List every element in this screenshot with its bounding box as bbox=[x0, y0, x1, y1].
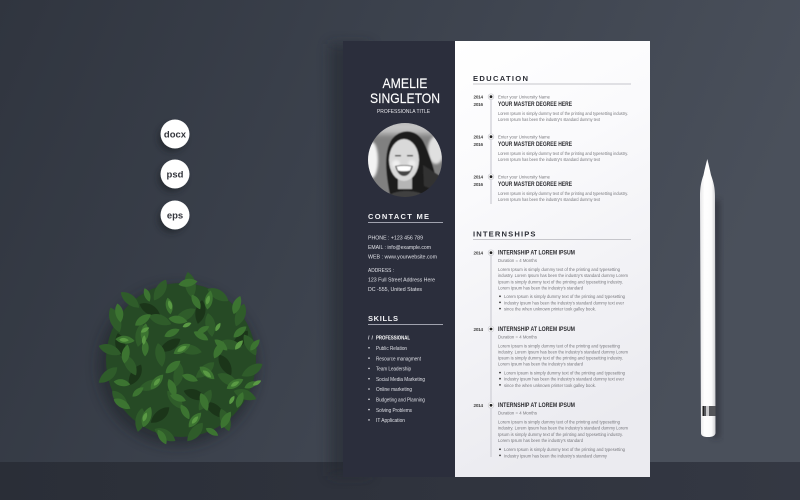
heading: education: EDUCATION bbox=[473, 74, 528, 83]
internship entry 2: industry. Lorem Ipsum has been the industry's standard dummy Lorem bbox=[498, 349, 628, 354]
resume document bbox=[343, 41, 650, 477]
heading: skills: SKILLS bbox=[368, 314, 398, 323]
education entry 1: 2016 bbox=[474, 102, 483, 107]
internship entry 2: Industry Ipsum has been the industry's standard dummy text ever bbox=[504, 377, 624, 382]
panel: dark sidebar bbox=[343, 41, 455, 477]
skills list: Team Leadership bbox=[376, 367, 411, 373]
internship entry 1: since the when unknown printer took galley book. bbox=[504, 306, 596, 312]
skills list: IT Application bbox=[376, 418, 405, 424]
job title: PROFESSIONLA TITLE bbox=[377, 109, 430, 115]
internship entry 2: 2014 bbox=[474, 327, 483, 332]
education entry 3: 2016 bbox=[474, 182, 483, 187]
icon: white stylus pencil bbox=[700, 159, 720, 438]
paper shadow bbox=[330, 44, 370, 476]
education entry 1 bbox=[474, 94, 628, 122]
education entry 2: 2014 bbox=[474, 134, 483, 140]
skills list: Resource managment bbox=[376, 356, 421, 362]
internship entry 3: INTERNSHIP AT LOREM IPSUM bbox=[498, 403, 575, 409]
internship entry 2: Lorem Ipsum is simply dummy text of the printing and typesetting bbox=[504, 370, 625, 376]
contact details: ADDRESS : bbox=[368, 268, 394, 274]
internship entry 1: industry. Lorem Ipsum has been the industry's standard dummy Lorem bbox=[498, 273, 628, 278]
contact details: EMAIL : info@example.com bbox=[368, 245, 431, 251]
internship entry 3: Lorem Ipsum is simply dummy text of the printing and typesetting bbox=[504, 447, 625, 452]
floor bbox=[0, 462, 800, 500]
education entry 3: Lorem Ipsum is simply dummy text of the printing and typesetting industry. bbox=[498, 191, 628, 196]
skills list: Social Media Marketing bbox=[376, 377, 425, 383]
internship entry 1: INTERNSHIP AT LOREM IPSUM bbox=[498, 250, 575, 256]
education entry 2: YOUR MASTER DEGREE HERE bbox=[498, 142, 572, 148]
internship entry 3 bbox=[474, 402, 628, 458]
education entry 1: YOUR MASTER DEGREE HERE bbox=[498, 102, 572, 108]
skills list: Public Relation bbox=[376, 346, 407, 352]
contact details: 123 Full Street Address Here bbox=[368, 278, 435, 284]
name heading: AMELIE bbox=[382, 75, 428, 91]
badge: docx: docx bbox=[164, 130, 187, 140]
internship entry 1: Lorem Ipsum is simply dummy text of the printing and typesetting bbox=[498, 267, 620, 272]
badge: psd: psd bbox=[167, 170, 184, 180]
contact details: PHONE : +123 456 789 bbox=[368, 236, 423, 242]
internship entry 1: Lorem Ipsum is simply dummy text of the printing and typesetting bbox=[504, 294, 625, 299]
panel: skills bbox=[368, 314, 443, 424]
internship entry 2 bbox=[474, 326, 628, 388]
internship entry 3: Industry Ipsum has been the industry's standard dummy bbox=[504, 453, 608, 458]
badge: eps: eps bbox=[167, 210, 183, 222]
internship entry 2: Duration = 4 Months bbox=[498, 334, 538, 339]
internship entry 3: Lorem Ipsum has been the industry's standard bbox=[498, 438, 583, 443]
education entry 3: YOUR MASTER DEGREE HERE bbox=[498, 182, 572, 188]
internship entry 3: Lorem Ipsum is simply dummy text of the printing and typesetting bbox=[498, 420, 620, 425]
heading: internships: INTERNSHIPS bbox=[473, 230, 536, 239]
timeline bbox=[490, 250, 492, 457]
internship entry 2: Lorem Ipsum is simply dummy text of the printing and typesetting bbox=[498, 343, 620, 348]
contact details: WEB : www.yourwebsite.com bbox=[368, 254, 437, 260]
education entry 3: Lorem Ipsum has been the industry's standard dummy text bbox=[498, 197, 601, 202]
internship entry 1 bbox=[474, 250, 628, 312]
name heading bbox=[370, 75, 440, 106]
education entry 2: Enter your University Name bbox=[498, 134, 550, 140]
education entry 3: Enter your University Name bbox=[498, 174, 550, 180]
skills list: Solving Problems bbox=[376, 408, 412, 414]
internship entry 1: Ipsum is simply dummy text of the printing and typesetting industry. bbox=[498, 279, 623, 284]
internship entry 3: Duration = 4 Months bbox=[498, 411, 538, 416]
internship entry 1: 2014 bbox=[474, 250, 483, 256]
internship entry 3: Ipsum is simply dummy text of the printing and typesetting industry. bbox=[498, 432, 623, 437]
skills list: Budgeting and Planning bbox=[376, 398, 425, 404]
education entry 2: 2016 bbox=[474, 142, 483, 147]
education entry 1: Enter your University Name bbox=[498, 94, 550, 100]
internship entry 3: industry. Lorem Ipsum has been the industry's standard dummy Lorem bbox=[498, 426, 628, 431]
portrait photo bbox=[368, 123, 442, 197]
contact details: DC -555, United States bbox=[368, 287, 422, 293]
education entry 2: Lorem Ipsum has been the industry's standard dummy text bbox=[498, 157, 601, 162]
education entry 1: 2014 bbox=[474, 94, 483, 100]
heading: contact me: CONTACT ME bbox=[368, 212, 429, 221]
education entry 1: Lorem Ipsum has been the industry's standard dummy text bbox=[498, 117, 601, 122]
internship entry 1: Lorem Ipsum has been the industry's standard bbox=[498, 285, 583, 290]
file format badges bbox=[158, 120, 190, 233]
education entry 3: 2014 bbox=[474, 174, 483, 180]
skills list bbox=[368, 336, 425, 424]
internship entry 1: Duration = 4 Months bbox=[498, 258, 538, 263]
skills list: Online marketing bbox=[376, 387, 412, 393]
internship entry 2: Ipsum is simply dummy text of the printing and typesetting industry. bbox=[498, 356, 623, 361]
skills list: PROFESSIONAL bbox=[376, 336, 411, 342]
panel: white main column bbox=[454, 41, 650, 477]
internship entry 2: Lorem Ipsum has been the industry's standard bbox=[498, 362, 583, 367]
education entry 2 bbox=[474, 134, 628, 162]
name heading: SINGLETON bbox=[370, 90, 440, 106]
contact details bbox=[368, 236, 437, 293]
pencil metal band bbox=[702, 406, 716, 416]
internship entry 2: since the when unknown printer took galley book. bbox=[504, 383, 596, 388]
panel: internships bbox=[473, 230, 631, 458]
icon: plant seen from above bbox=[96, 271, 265, 446]
education entry 3 bbox=[474, 174, 628, 202]
panel: contact bbox=[368, 212, 443, 293]
timeline bbox=[490, 94, 492, 204]
skills list: // bbox=[368, 336, 374, 342]
education entry 2: Lorem Ipsum is simply dummy text of the printing and typesetting industry. bbox=[498, 151, 628, 156]
internship entry 2: INTERNSHIP AT LOREM IPSUM bbox=[498, 327, 575, 333]
education entry 1: Lorem Ipsum is simply dummy text of the printing and typesetting industry. bbox=[498, 111, 628, 116]
internship entry 3: 2014 bbox=[474, 403, 483, 408]
panel: education bbox=[473, 74, 631, 204]
internship entry 1: Industry Ipsum has been the industry's standard dummy text ever bbox=[504, 300, 624, 305]
